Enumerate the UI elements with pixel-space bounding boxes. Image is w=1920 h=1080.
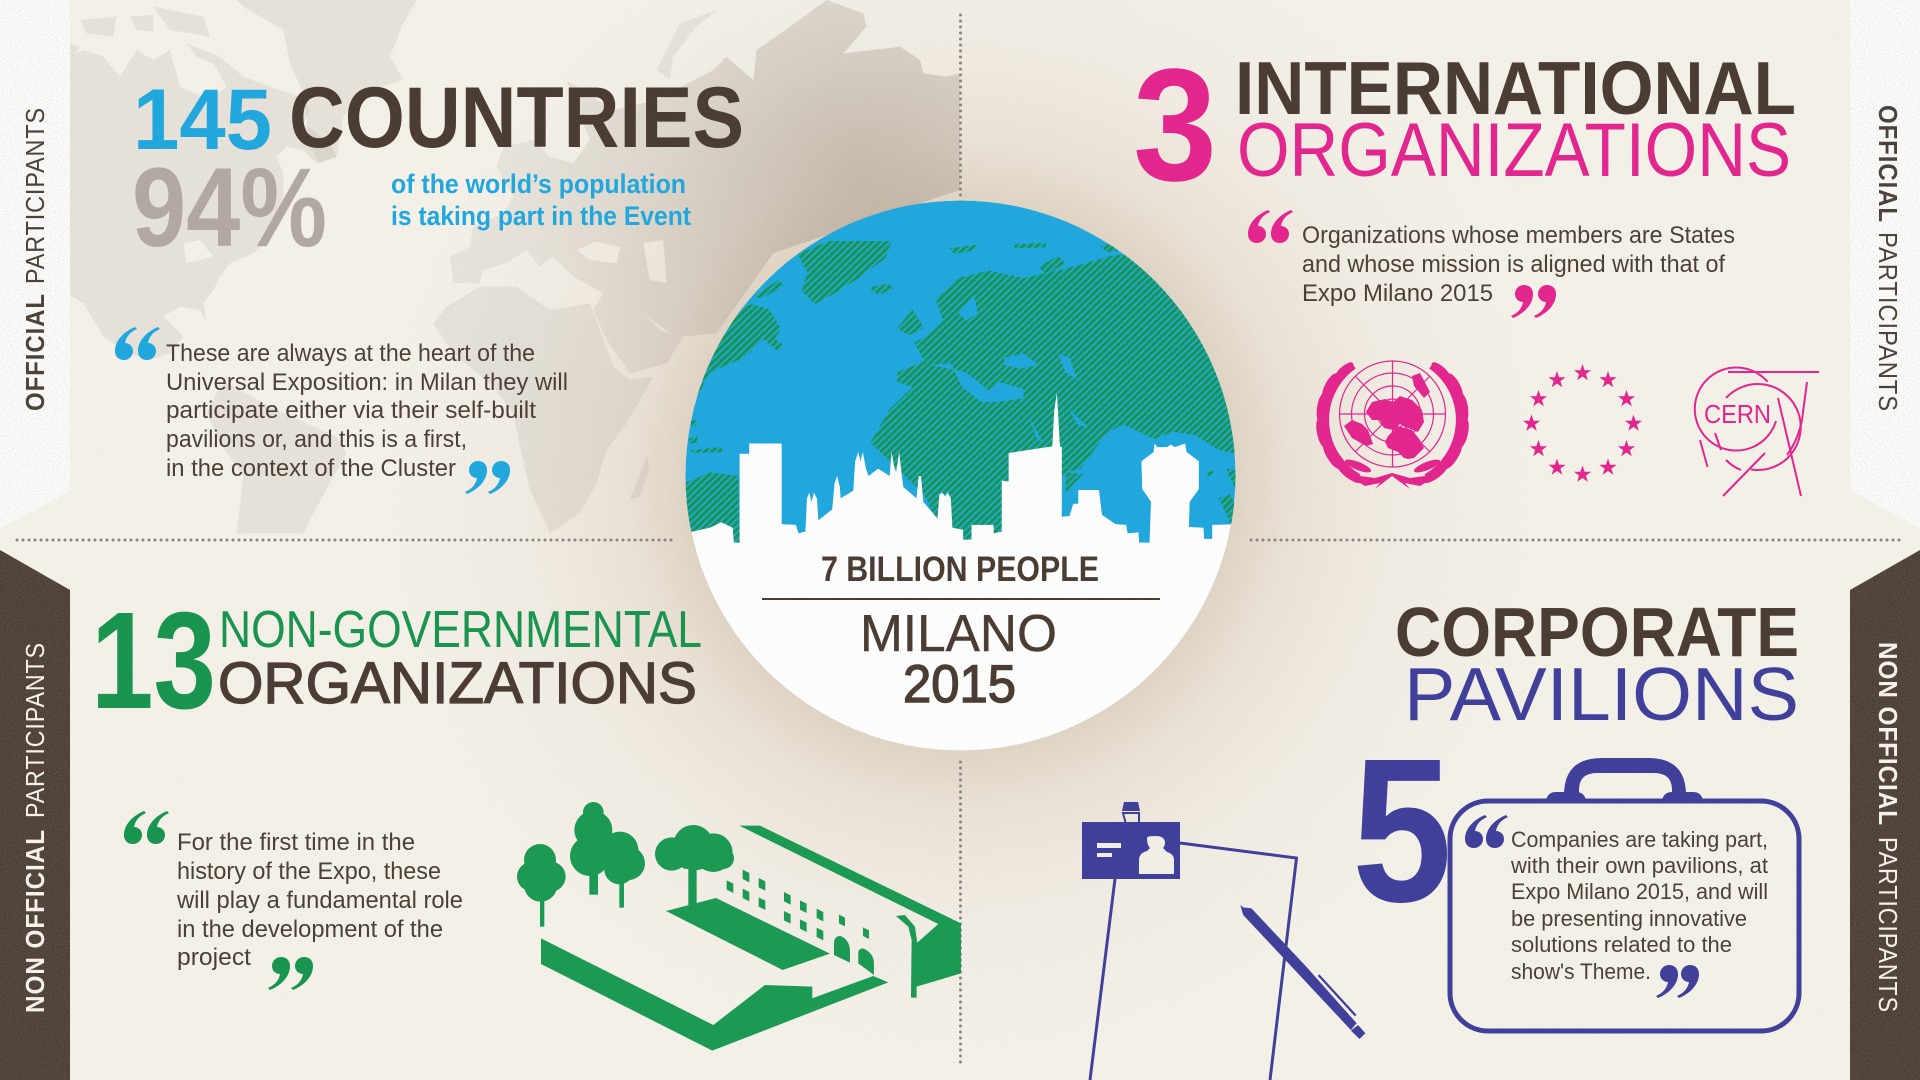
population note — [391, 169, 691, 231]
heading: organizations: ORGANIZATIONS — [1237, 108, 1791, 193]
panel: corporate pavilions — [1082, 593, 1799, 1080]
world map background — [67, 0, 960, 533]
icon: closing quote blue — [465, 461, 510, 494]
body text: project — [177, 944, 251, 971]
numeral 3: 3 — [1133, 35, 1217, 214]
caption: 2015: 2015 — [903, 655, 1016, 714]
globe land hatching — [675, 241, 1265, 550]
body text: in the context of the Cluster — [166, 455, 456, 482]
body text: participate either via their self-built — [166, 397, 536, 424]
body text: These are always at the heart of the — [166, 340, 535, 367]
icon: opening quote blue — [115, 327, 160, 360]
body text: in the development of the — [177, 916, 443, 943]
icon: pen — [1240, 905, 1365, 1039]
icon: opening quote green — [124, 811, 169, 844]
label: non official participants right — [1873, 642, 1903, 1013]
heading: pavilions: PAVILIONS — [1404, 652, 1799, 736]
label: non official participants left — [20, 642, 50, 1013]
body text: be presenting innovative — [1511, 906, 1747, 931]
label: official participants left: PARTICIPANTS — [20, 107, 50, 284]
divider line — [762, 598, 1160, 600]
body text: solutions related to the — [1511, 932, 1732, 957]
heading: 145 countries: 145 — [133, 72, 272, 168]
body text: history of the Expo, these — [177, 858, 441, 885]
heading: organizations: ORGANIZATIONS — [218, 651, 697, 716]
label: non official participants left: PARTICIPANTS — [20, 642, 50, 818]
body text: Companies are taking part, — [1511, 827, 1768, 852]
caption: 7 billion people: 7 BILLION PEOPLE — [821, 550, 1099, 589]
globe — [675, 200, 1265, 757]
panel: countries — [115, 70, 744, 494]
label: official participants left — [20, 107, 50, 411]
side strip: non official right — [1850, 550, 1920, 1080]
body text: Expo Milano 2015 — [1302, 280, 1493, 307]
body text: Expo Milano 2015, and will — [1511, 879, 1768, 904]
body text: will play a fundamental role — [176, 887, 463, 914]
icon: closing quote indigo — [1656, 965, 1699, 998]
caption: milano: MILANO — [860, 605, 1057, 663]
logo: European Union stars — [1523, 364, 1642, 482]
illustration: document sheet — [1090, 843, 1296, 1080]
icon: closing quote green — [268, 957, 313, 990]
logo: CERN — [1695, 368, 1819, 496]
icon: opening quote indigo — [1465, 815, 1508, 848]
body text — [166, 340, 568, 482]
icon: briefcase — [1450, 758, 1799, 1031]
heading: international: INTERNATIONAL — [1235, 46, 1796, 130]
side strip: official left — [0, 0, 70, 529]
heading: corporate: CORPORATE — [1395, 593, 1799, 671]
label: non official participants right: PARTICIPANTS — [1873, 837, 1903, 1013]
population note: is taking part in the Event — [391, 201, 691, 231]
body text: pavilions or, and this is a first, — [166, 426, 467, 453]
statistic: 94%: 94% — [132, 145, 327, 270]
label: official participants left: OFFICIAL — [20, 293, 50, 411]
numeral 5: 5 — [1352, 716, 1452, 945]
label: official participants right: PARTICIPANTS — [1873, 232, 1903, 412]
body text — [176, 829, 463, 971]
numeral 13: 13 — [91, 584, 216, 738]
logo: United Nations emblem — [1314, 360, 1471, 489]
heading: non-governmental: NON-GOVERNMENTAL — [219, 601, 702, 659]
side strip: official right — [1850, 0, 1920, 529]
icon: id badge — [1082, 802, 1180, 879]
body text: with their own pavilions, at — [1510, 853, 1768, 878]
label: official participants right: OFFICIAL — [1873, 105, 1903, 223]
skyline silhouette — [679, 393, 1242, 757]
body text: and whose mission is aligned with that of — [1302, 251, 1725, 278]
icon: opening quote magenta — [1248, 210, 1293, 243]
body text — [1510, 827, 1768, 984]
heading: 145 countries: COUNTRIES — [289, 70, 744, 166]
logo: CERN: CERN — [1704, 399, 1771, 429]
illustration: isometric building and trees — [517, 802, 961, 1051]
panel: international organizations — [1133, 35, 1819, 496]
body text: Universal Exposition: in Milan they will — [166, 369, 568, 396]
body text — [1302, 222, 1735, 307]
label: non official participants left: NON OFFICIAL — [20, 829, 50, 1013]
heading: 145 countries — [133, 70, 744, 168]
population note: of the world’s population — [391, 169, 686, 199]
panel: non-governmental organizations — [91, 584, 961, 1051]
icon: closing quote magenta — [1511, 285, 1556, 318]
body text: Organizations whose members are States — [1302, 222, 1735, 249]
label: non official participants right: NON OFFICIAL — [1873, 642, 1903, 826]
body text: show's Theme. — [1511, 959, 1651, 984]
body text: For the first time in the — [177, 829, 415, 856]
label: official participants right — [1873, 105, 1903, 412]
side strip: non official left — [0, 550, 70, 1080]
